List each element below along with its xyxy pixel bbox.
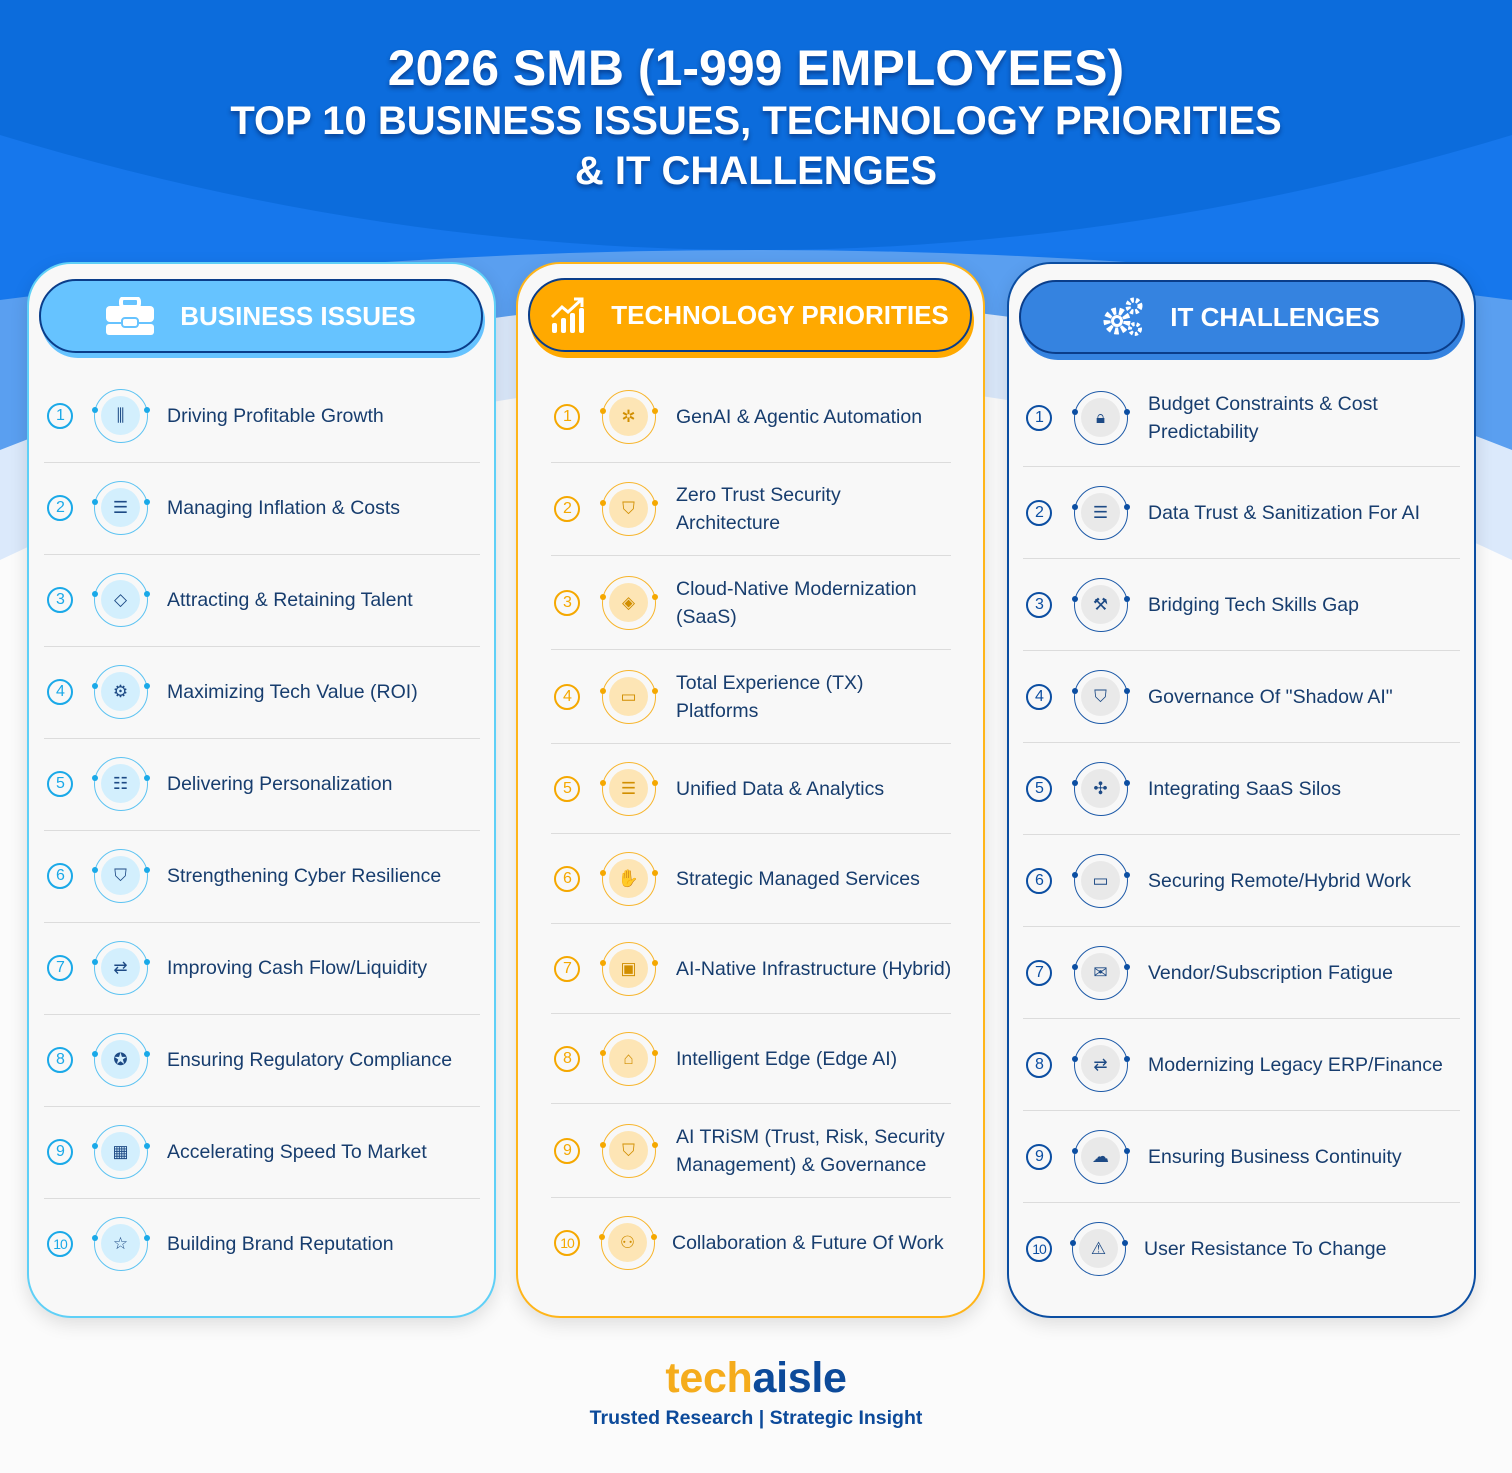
item 6: 6 [1035, 872, 1043, 889]
heading: business issues: BUSINESS ISSUES [180, 300, 416, 330]
item 9 [47, 1125, 427, 1179]
item 6: Securing Remote/Hybrid Work [1148, 870, 1411, 892]
item 5 [47, 757, 392, 811]
item 7: Vendor/Subscription Fatigue [1148, 962, 1393, 984]
item 8: 8 [56, 1051, 64, 1068]
item 10: 10 [560, 1235, 574, 1251]
item 5 [1026, 762, 1341, 816]
item 8: ⇄ [1093, 1054, 1108, 1074]
item 5: 5 [563, 780, 571, 797]
heading: technology priorities: TECHNOLOGY PRIORITIES [611, 300, 949, 330]
item 9: 9 [56, 1143, 64, 1160]
heading: business issues [39, 279, 483, 353]
item 8 [554, 1032, 897, 1086]
item 6: ▭ [1092, 870, 1109, 890]
item 9: AI TRiSM (Trust, Risk, Security [676, 1126, 945, 1148]
item 8 [1026, 1038, 1443, 1092]
item 10: 10 [53, 1236, 67, 1252]
item 9: ▦ [112, 1142, 129, 1160]
logo: techaisle [590, 1354, 922, 1429]
item 8: ✪ [113, 1050, 128, 1068]
list: business issues [44, 389, 480, 1271]
item 8: Modernizing Legacy ERP/Finance [1148, 1054, 1443, 1076]
item 7 [1026, 946, 1393, 1000]
item 2: Architecture [676, 512, 780, 534]
heading: technology priorities [528, 278, 972, 352]
item 3: Attracting & Retaining Talent [167, 589, 413, 611]
item 3: ⚒ [1093, 594, 1108, 614]
item 3 [47, 573, 413, 627]
item 6: ✋ [618, 868, 639, 888]
item 6: ⛉ [114, 866, 127, 884]
item 7: AI-Native Infrastructure (Hybrid) [676, 958, 951, 980]
item 6 [47, 849, 441, 903]
item 7: Improving Cash Flow/Liquidity [167, 957, 427, 979]
item 7 [47, 941, 427, 995]
item 10: ⚇ [620, 1232, 635, 1252]
item 4 [47, 665, 418, 719]
item 1 [554, 390, 922, 444]
list: IT challenges [1023, 391, 1460, 1276]
item 1: 🔒︎ [1096, 408, 1105, 426]
item 10: ⚠ [1091, 1238, 1106, 1258]
item 5: ✣ [1093, 778, 1108, 798]
item 4: 4 [563, 688, 571, 705]
item 1: ⫼ [117, 406, 124, 424]
item 1: 1 [563, 408, 571, 425]
item 2 [554, 482, 841, 536]
item 7: ✉ [1093, 962, 1108, 982]
title: & IT CHALLENGES [575, 149, 937, 193]
panel: technology priorities [516, 262, 985, 1318]
list: technology priorities [551, 390, 951, 1270]
item 1 [47, 389, 384, 443]
item 6: Strategic Managed Services [676, 868, 920, 890]
item 1: Predictability [1148, 421, 1259, 443]
item 8 [47, 1033, 452, 1087]
item 8: 8 [1035, 1056, 1043, 1073]
item 5: ☰ [621, 778, 636, 798]
item 2 [47, 481, 400, 535]
item 4: Governance Of "Shadow AI" [1148, 686, 1393, 708]
item 3: Cloud-Native Modernization [676, 578, 917, 600]
item 2: Managing Inflation & Costs [167, 497, 400, 519]
item 1: 1 [56, 407, 64, 424]
item 6 [1026, 854, 1411, 908]
item 10: User Resistance To Change [1144, 1238, 1386, 1260]
item 4: ⛉ [1094, 686, 1107, 706]
item 2: ⛉ [622, 498, 635, 518]
panel: business issues [27, 262, 496, 1318]
item 8: Intelligent Edge (Edge AI) [676, 1048, 897, 1070]
item 9: Ensuring Business Continuity [1148, 1146, 1402, 1168]
item 8: ⌂ [623, 1048, 634, 1068]
item 3: 3 [563, 594, 571, 611]
item 9: 9 [563, 1142, 571, 1159]
item 9 [554, 1124, 945, 1178]
title: TOP 10 BUSINESS ISSUES, TECHNOLOGY PRIORITIES [230, 99, 1282, 143]
item 10 [1026, 1222, 1386, 1276]
item 3: 3 [56, 591, 64, 608]
item 6: 6 [56, 867, 64, 884]
item 7 [554, 942, 951, 996]
item 2: 2 [563, 500, 571, 517]
item 4: Platforms [676, 700, 758, 722]
item 1: ✲ [621, 406, 636, 426]
logo: techaisle: Trusted Research | Strategic Insight [590, 1407, 922, 1429]
item 3: Bridging Tech Skills Gap [1148, 594, 1359, 616]
item 6 [554, 852, 920, 906]
item 5: Integrating SaaS Silos [1148, 778, 1341, 800]
item 4: 4 [56, 683, 64, 700]
item 8: Ensuring Regulatory Compliance [167, 1049, 452, 1071]
item 2 [1026, 486, 1420, 540]
item 1 [1026, 391, 1378, 445]
item 2: ☰ [1093, 502, 1108, 522]
item 1: GenAI & Agentic Automation [676, 406, 922, 428]
item 10: Building Brand Reputation [167, 1233, 394, 1255]
item 3 [554, 576, 917, 630]
item 7: ⇄ [113, 958, 128, 976]
item 9: Accelerating Speed To Market [167, 1141, 427, 1163]
item 7: 7 [56, 959, 64, 976]
item 10 [47, 1217, 394, 1271]
item 9: Management) & Governance [676, 1154, 926, 1176]
item 3: (SaaS) [676, 606, 737, 628]
item 4 [554, 670, 864, 724]
item 9: ⛉ [622, 1140, 635, 1160]
item 10: 10 [1032, 1241, 1046, 1257]
item 5 [554, 762, 884, 816]
item 3: ◈ [622, 592, 635, 612]
item 5: ☷ [113, 774, 128, 792]
item 4: ⚙ [113, 682, 128, 700]
item 5: 5 [1035, 780, 1043, 797]
item 6: Strengthening Cyber Resilience [167, 865, 441, 887]
item 3: ◇ [114, 590, 127, 608]
item 2: Zero Trust Security [676, 484, 841, 506]
item 1: Driving Profitable Growth [167, 405, 384, 427]
item 10 [554, 1216, 944, 1270]
item 4: Maximizing Tech Value (ROI) [167, 681, 418, 703]
heading: IT challenges: IT CHALLENGES [1170, 302, 1380, 332]
item 6: 6 [563, 870, 571, 887]
item 2: 2 [56, 499, 64, 516]
item 9: ☁ [1092, 1146, 1109, 1166]
item 3 [1026, 578, 1359, 632]
title [228, 40, 1282, 193]
item 7: ▣ [620, 958, 637, 978]
item 2: 2 [1035, 504, 1043, 521]
item 4 [1026, 670, 1393, 724]
logo: techaisle: techaisle [665, 1354, 847, 1402]
background waves [0, 0, 1512, 560]
item 3: 3 [1035, 596, 1043, 613]
item 2: ☰ [113, 498, 128, 516]
item 4: Total Experience (TX) [676, 672, 864, 694]
item 1: 1 [1035, 409, 1043, 426]
title: 2026 SMB (1-999 EMPLOYEES) [388, 40, 1124, 96]
item 1: Budget Constraints & Cost [1148, 393, 1378, 415]
item 4: ▭ [620, 686, 637, 706]
item 5: Delivering Personalization [167, 773, 392, 795]
item 7: 7 [1035, 964, 1043, 981]
item 5: 5 [56, 775, 64, 792]
item 2: Data Trust & Sanitization For AI [1148, 502, 1420, 524]
heading: IT challenges [1019, 280, 1463, 354]
item 8: 8 [563, 1050, 571, 1067]
item 5: Unified Data & Analytics [676, 778, 884, 800]
item 10: Collaboration & Future Of Work [672, 1232, 944, 1254]
panel: IT challenges [1007, 262, 1476, 1318]
item 4: 4 [1035, 688, 1043, 705]
item 9: 9 [1035, 1148, 1043, 1165]
item 9 [1026, 1130, 1402, 1184]
item 10: ☆ [113, 1234, 128, 1252]
item 7: 7 [563, 960, 571, 977]
